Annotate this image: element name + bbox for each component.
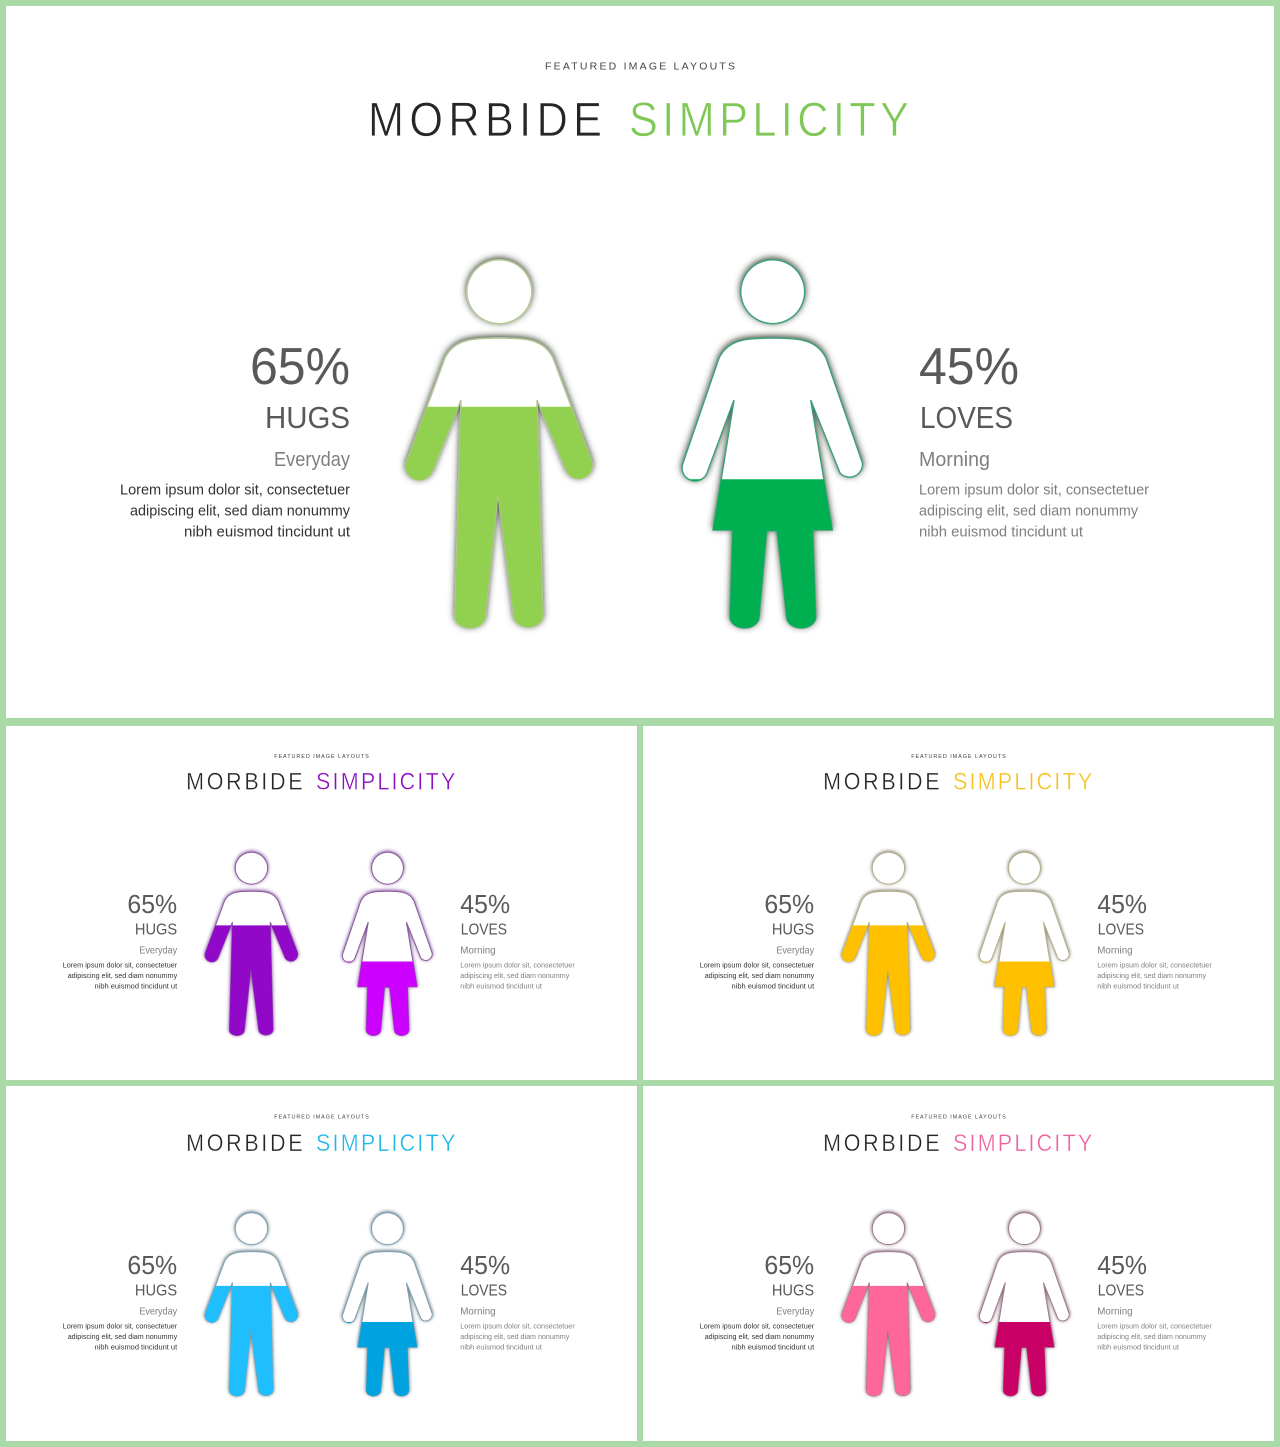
right stat: loves: adipiscing elit, sed diam nonummy: [1097, 1332, 1207, 1341]
left stat: hugs: HUGS: [772, 921, 814, 938]
left stat: hugs: nibh euismod tincidunt ut: [732, 981, 814, 990]
right stat: loves: 45%: [1097, 1252, 1147, 1280]
left stat: hugs: HUGS: [135, 921, 177, 938]
panel: yellow layout: [643, 726, 1274, 1080]
left stat: hugs: Lorem ipsum dolor sit, consectetuer: [63, 961, 178, 970]
right stat: loves: 45%: [460, 891, 510, 919]
left stat: hugs: Everyday: [274, 449, 350, 471]
eyebrow label: FEATURED IMAGE LAYOUTS: [274, 1114, 369, 1120]
left stat: hugs: adipiscing elit, sed diam nonummy: [68, 1332, 178, 1341]
right stat: loves: adipiscing elit, sed diam nonummy: [460, 1332, 570, 1341]
panel: purple layout: [6, 726, 637, 1080]
left stat: hugs: [700, 891, 815, 990]
left stat: hugs: nibh euismod tincidunt ut: [732, 1342, 814, 1351]
title: [186, 1129, 455, 1156]
right stat: loves: LOVES: [461, 921, 507, 938]
left stat: hugs: HUGS: [772, 1282, 814, 1299]
title: [368, 93, 909, 147]
left stat: hugs: 65%: [250, 338, 350, 396]
left stat: hugs: adipiscing elit, sed diam nonummy: [68, 971, 178, 980]
right stat: loves: [919, 338, 1149, 540]
right stat: loves: Lorem ipsum dolor sit, consectetuer: [1097, 1322, 1212, 1331]
left stat: hugs: adipiscing elit, sed diam nonummy: [705, 1332, 815, 1341]
title: SIMPLICITY: [316, 768, 455, 795]
title: [823, 1129, 1092, 1156]
right stat: loves: LOVES: [1098, 921, 1144, 938]
right stat: loves: [460, 1252, 575, 1351]
left stat: hugs: Everyday: [776, 1306, 814, 1317]
right stat: loves: 45%: [460, 1252, 510, 1280]
title: [186, 768, 455, 795]
eyebrow label: FEATURED IMAGE LAYOUTS: [545, 60, 735, 72]
left stat: hugs: Lorem ipsum dolor sit, consectetuer: [700, 1322, 815, 1331]
left stat: hugs: Everyday: [139, 1306, 177, 1317]
title: MORBIDE: [186, 1129, 303, 1156]
title: [823, 768, 1092, 795]
right stat: loves: adipiscing elit, sed diam nonummy: [919, 504, 1139, 520]
left stat: hugs: nibh euismod tincidunt ut: [95, 1342, 177, 1351]
title: MORBIDE: [823, 768, 940, 795]
title: MORBIDE: [186, 768, 303, 795]
left stat: hugs: HUGS: [265, 400, 350, 435]
left stat: hugs: adipiscing elit, sed diam nonummy: [130, 504, 351, 520]
right stat: loves: nibh euismod tincidunt ut: [919, 524, 1083, 540]
right stat: loves: adipiscing elit, sed diam nonummy: [460, 971, 570, 980]
title: SIMPLICITY: [953, 1129, 1092, 1156]
left stat: hugs: Everyday: [776, 945, 814, 956]
left stat: hugs: [120, 338, 351, 540]
right stat: loves: Morning: [919, 449, 990, 471]
right stat: loves: Lorem ipsum dolor sit, consectetuer: [919, 482, 1149, 498]
right stat: loves: 45%: [1097, 891, 1147, 919]
icon: man 65% filled: [406, 260, 592, 628]
right stat: loves: nibh euismod tincidunt ut: [1097, 981, 1179, 990]
left stat: hugs: 65%: [127, 891, 177, 919]
right stat: loves: adipiscing elit, sed diam nonummy: [1097, 971, 1207, 980]
icon: woman 45% filled: [979, 1213, 1069, 1396]
left stat: hugs: 65%: [764, 891, 814, 919]
right stat: loves: Morning: [1097, 1306, 1133, 1317]
right stat: loves: Lorem ipsum dolor sit, consectetuer: [1097, 961, 1212, 970]
right stat: loves: nibh euismod tincidunt ut: [1097, 1342, 1179, 1351]
icon: man 65% filled: [205, 852, 298, 1036]
panel: pink layout: [643, 1086, 1274, 1441]
right stat: loves: Morning: [460, 1306, 496, 1317]
eyebrow label: FEATURED IMAGE LAYOUTS: [911, 754, 1006, 760]
left stat: hugs: [700, 1252, 815, 1351]
right stat: loves: Lorem ipsum dolor sit, consectetuer: [460, 961, 575, 970]
left stat: hugs: HUGS: [135, 1282, 177, 1299]
icon: woman 45% filled: [979, 852, 1069, 1036]
title: SIMPLICITY: [629, 93, 909, 147]
title: SIMPLICITY: [316, 1129, 455, 1156]
left stat: hugs: Lorem ipsum dolor sit, consectetuer: [63, 1322, 178, 1331]
right stat: loves: nibh euismod tincidunt ut: [460, 1342, 542, 1351]
left stat: hugs: 65%: [127, 1252, 177, 1280]
right stat: loves: [1097, 891, 1212, 990]
title: SIMPLICITY: [953, 768, 1092, 795]
eyebrow label: FEATURED IMAGE LAYOUTS: [274, 754, 369, 760]
right stat: loves: Lorem ipsum dolor sit, consectetuer: [460, 1322, 575, 1331]
left stat: hugs: nibh euismod tincidunt ut: [184, 524, 350, 540]
right stat: loves: nibh euismod tincidunt ut: [460, 981, 542, 990]
panel: blue layout: [6, 1086, 637, 1441]
left stat: hugs: adipiscing elit, sed diam nonummy: [705, 971, 815, 980]
icon: woman 45% filled: [342, 852, 432, 1036]
right stat: loves: Morning: [1097, 945, 1133, 956]
icon: man 65% filled: [205, 1213, 298, 1396]
left stat: hugs: nibh euismod tincidunt ut: [95, 981, 177, 990]
right stat: loves: [1097, 1252, 1212, 1351]
left stat: hugs: 65%: [764, 1252, 814, 1280]
left stat: hugs: [63, 891, 178, 990]
left stat: hugs: [63, 1252, 178, 1351]
title: MORBIDE: [823, 1129, 940, 1156]
right stat: loves: 45%: [919, 338, 1019, 396]
panel: main green layout: [6, 6, 1274, 718]
icon: woman 45% filled: [682, 260, 863, 628]
title: MORBIDE: [368, 93, 602, 147]
right stat: loves: [460, 891, 575, 990]
icon: man 65% filled: [842, 1213, 935, 1396]
left stat: hugs: Lorem ipsum dolor sit, consectetuer: [700, 961, 815, 970]
left stat: hugs: Everyday: [139, 945, 177, 956]
icon: woman 45% filled: [342, 1213, 432, 1396]
right stat: loves: LOVES: [1098, 1282, 1144, 1299]
eyebrow label: FEATURED IMAGE LAYOUTS: [911, 1114, 1006, 1120]
left stat: hugs: Lorem ipsum dolor sit, consectetuer: [120, 482, 350, 498]
right stat: loves: Morning: [460, 945, 496, 956]
right stat: loves: LOVES: [461, 1282, 507, 1299]
right stat: loves: LOVES: [920, 400, 1013, 435]
icon: man 65% filled: [842, 852, 935, 1036]
